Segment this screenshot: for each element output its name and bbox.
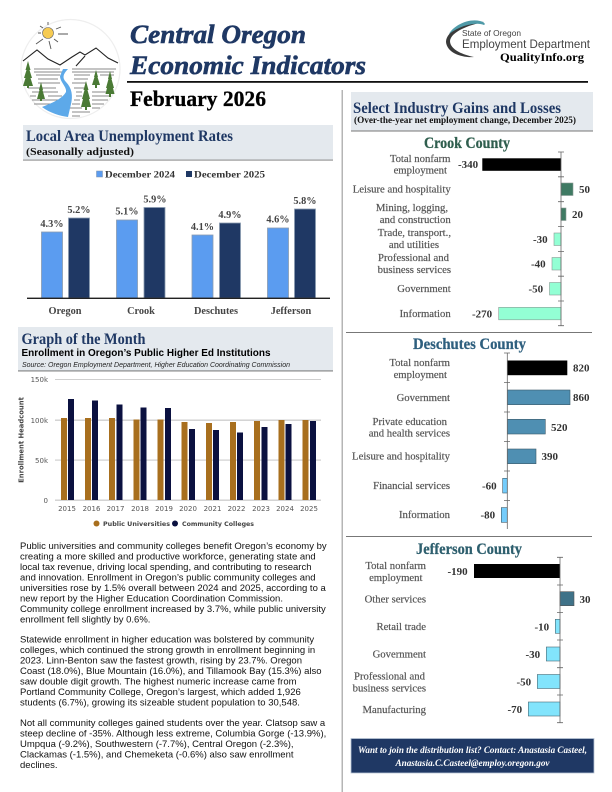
bar chart: enrollment headcount: 150k xyxy=(31,376,49,384)
heading: graph of the month xyxy=(18,327,333,371)
bar chart: Crook County xyxy=(353,152,590,326)
bar chart: enrollment headcount: 2025 xyxy=(300,505,318,513)
bar chart: Deschutes County: 820 xyxy=(573,362,590,374)
legend: enrollment: Community Colleges xyxy=(182,521,254,528)
bar chart: unemployment rates: 5.8% xyxy=(293,196,317,207)
heading: graph of the month: Graph of the Month xyxy=(22,331,146,348)
bar chart: enrollment headcount: 2018 xyxy=(131,505,149,513)
bar chart: Deschutes County: Government xyxy=(397,392,450,404)
bar chart: Deschutes County: 860 xyxy=(573,392,590,404)
title xyxy=(129,20,366,80)
bar chart: Crook County: Trade, transport., xyxy=(378,227,451,239)
bar chart: Deschutes County: Total nonfarm xyxy=(389,357,451,369)
panel: Crook County xyxy=(353,135,590,326)
legend xyxy=(96,170,265,180)
text block: article paragraph 1: local tax revenue, driving local spending, and contributing to research xyxy=(20,562,312,573)
bar chart: Crook County: -40 xyxy=(531,258,546,270)
bar chart: Deschutes County: -60 xyxy=(482,480,497,492)
callout: distribution list: Anastasia.C.Casteel@employ.oregon.gov xyxy=(395,758,550,769)
heading: Deschutes County: Deschutes County xyxy=(413,336,526,353)
bar chart: unemployment rates: 4.1% xyxy=(191,222,214,233)
text block: article paragraph 2: colleges, which continued the strong growth in enrollment beginning in xyxy=(20,645,315,656)
bar chart: unemployment rates xyxy=(27,194,330,317)
legend: enrollment: Public Universities xyxy=(103,521,170,528)
bar chart: Jefferson County: -70 xyxy=(508,704,523,716)
logo: State of Oregon Employment Department xyxy=(446,20,591,64)
bar chart: Deschutes County: Leisure and hospitality xyxy=(352,450,451,462)
legend: December 2024 xyxy=(105,170,175,180)
heading: local area unemployment rates xyxy=(23,125,333,161)
text block: article paragraph 1: and innovation. Enrollment in Oregon’s public community colleges and xyxy=(20,572,316,584)
panel: Jefferson County xyxy=(353,541,591,723)
legend: enrollment xyxy=(94,520,254,528)
bar chart: enrollment headcount: 2019 xyxy=(155,505,173,513)
bar chart: Crook County: -270 xyxy=(472,308,493,320)
heading: local area unemployment rates: (Seasonally adjusted) xyxy=(26,147,135,158)
bar chart: Crook County: employment xyxy=(394,164,447,176)
bar chart: unemployment rates: 4.6% xyxy=(266,214,290,226)
text block: article paragraph 1: Public universities and community colleges benefit Oregon’s economy by xyxy=(20,541,327,552)
bar chart: Jefferson County: Retail trade xyxy=(376,621,426,633)
bar chart: Jefferson County: -50 xyxy=(516,676,532,688)
bar chart: unemployment rates: Jefferson xyxy=(271,306,312,317)
callout: distribution list xyxy=(351,738,594,773)
panel: Deschutes County xyxy=(352,336,590,529)
bar chart: Jefferson County: -190 xyxy=(448,566,468,578)
date heading: February 2026 xyxy=(130,86,266,111)
text block: article paragraph 2: Statewide enrollment in higher education was bolstered by community xyxy=(20,634,314,646)
text block: article paragraph 3: Umpqua (-9.2%), Southwestern (-7.7%), Central Oregon (-2.3%), xyxy=(20,739,294,750)
bar chart: unemployment rates: 4.3% xyxy=(40,219,64,230)
bar chart: Crook County: -340 xyxy=(458,159,479,171)
bar chart: enrollment headcount: 2023 xyxy=(252,505,270,513)
text block: article paragraph 1: new report by the Higher Education Coordination Commission. xyxy=(20,594,283,604)
text block: article paragraph 2: Coast (18.0%), Blue Mountain (16.0%), and Tillamook Bay (15.3%) also xyxy=(20,666,322,677)
bar chart: Crook County: and utilities xyxy=(389,239,439,251)
heading: local area unemployment rates: Local Area Unemployment Rates xyxy=(26,128,233,145)
logo: mountains, river and trees xyxy=(21,20,120,118)
bar chart: enrollment headcount: 2015 xyxy=(58,505,76,513)
bar chart: Crook County: -50 xyxy=(528,284,544,296)
bar chart: enrollment headcount: 0 xyxy=(44,497,48,505)
bar chart: Jefferson County: -30 xyxy=(526,649,541,661)
bar chart: Jefferson County: -10 xyxy=(534,622,550,634)
legend: December 2025 xyxy=(194,170,265,180)
title: Central Oregon xyxy=(130,20,306,49)
bar chart: Jefferson County: 30 xyxy=(580,594,591,606)
bar chart: Jefferson County: employment xyxy=(369,572,423,584)
panel: local area unemployment rates xyxy=(23,125,333,317)
bar chart: enrollment headcount: 2017 xyxy=(107,505,124,513)
text block: article paragraph 1: universities rose by 1.5% overall between 2024 and 2025, according to a xyxy=(20,583,326,594)
bar chart: enrollment headcount: 50k xyxy=(35,457,49,465)
bar chart: Deschutes County xyxy=(352,353,590,529)
bar chart: enrollment headcount xyxy=(18,376,321,513)
panel: graph of the month xyxy=(18,327,333,528)
bar chart: Deschutes County: 390 xyxy=(542,451,558,463)
bar chart: Crook County: and construction xyxy=(380,214,451,226)
bar chart: Crook County: business services xyxy=(378,264,451,276)
bar chart: Jefferson County: Government xyxy=(373,648,426,660)
text block: article paragraph 2: 2023. Linn-Benton saw the fastest growth, rising by 23.7%. Oregon xyxy=(20,656,302,666)
logo: State of Oregon Employment Department: State of Oregon xyxy=(462,28,521,38)
bar chart: Deschutes County: and health services xyxy=(369,428,450,440)
column divider xyxy=(342,90,343,792)
divider xyxy=(346,536,592,537)
bar chart: Jefferson County: Manufacturing xyxy=(362,704,427,716)
text block: article paragraph 1: Community college enrollment increased by 3.7%, while public university xyxy=(20,604,326,615)
bar chart: Deschutes County: employment xyxy=(394,369,447,381)
divider xyxy=(346,332,592,333)
logo: State of Oregon Employment Department: QualityInfo.org xyxy=(500,50,584,64)
text block: article paragraph 2: saw double digit growth. The highest numeric increase came from xyxy=(20,676,297,688)
heading: Jefferson County: Jefferson County xyxy=(416,541,522,558)
bar chart: unemployment rates: Crook xyxy=(127,306,155,317)
bar chart: Crook County: Government xyxy=(397,283,451,295)
title: Economic Indicators xyxy=(129,51,366,80)
callout: distribution list: Want to join the distribution list? Contact: Anastasia Casteel, xyxy=(358,745,587,756)
bar chart: Jefferson County: business services xyxy=(353,682,426,694)
bar chart: enrollment headcount: Enrollment Headcount xyxy=(18,396,26,483)
bar chart: Jefferson County: Total nonfarm xyxy=(365,560,427,572)
text block: article paragraph 3: declines. xyxy=(20,760,58,771)
bar chart: enrollment headcount: 2020 xyxy=(179,505,197,513)
bar chart: enrollment headcount: 100k xyxy=(31,417,49,425)
bar chart: unemployment rates: 5.1% xyxy=(115,206,139,218)
text block: article paragraph 1: creating a more skilled and productive workforce, generating state and xyxy=(20,552,316,562)
bar chart: Deschutes County: -80 xyxy=(480,510,496,522)
bar chart: Crook County: Information xyxy=(400,308,451,320)
heading: select industry gains and losses: (Over-the-year net employment change, December 2025) xyxy=(354,115,576,125)
bar chart: Deschutes County: Financial services xyxy=(373,480,450,492)
bar chart: Crook County: Mining, logging, xyxy=(376,202,448,214)
logo: State of Oregon Employment Department: Employment Department xyxy=(462,37,591,51)
bar chart: enrollment headcount: 2024 xyxy=(276,505,294,513)
bar chart: unemployment rates: 5.2% xyxy=(67,205,91,216)
bar chart: Jefferson County xyxy=(353,557,591,723)
bar chart: unemployment rates: Deschutes xyxy=(194,306,238,317)
text block: article paragraph 3: Not all community colleges gained students over the year. Clatsop saw a xyxy=(20,718,326,729)
bar chart: Crook County: 50 xyxy=(579,184,590,196)
bar chart: Jefferson County: Other services xyxy=(365,594,426,606)
bar chart: enrollment headcount: 2022 xyxy=(228,505,245,513)
bar chart: Jefferson County: Professional and xyxy=(354,670,426,682)
text block: article paragraph 3: Clackamas (-1.5%), and Chemeketa (-0.6%) also saw enrollment xyxy=(20,750,294,760)
bar chart: Deschutes County: Private education xyxy=(372,416,448,428)
bar chart: unemployment rates: 4.9% xyxy=(218,210,242,221)
bar chart: unemployment rates: Oregon xyxy=(48,306,82,317)
heading: graph of the month: Source: Oregon Employment Department, Higher Education Coordinating Commission xyxy=(22,360,290,369)
bar chart: unemployment rates: 5.9% xyxy=(143,194,167,206)
text block: article paragraph 3: steep decline of -35%. Although less extreme, Columbia Gorge (-13.9%), xyxy=(20,728,326,740)
bar chart: enrollment headcount: 2021 xyxy=(204,505,221,513)
header rule xyxy=(127,81,588,83)
heading: select industry gains and losses: Select Industry Gains and Losses xyxy=(353,100,561,117)
bar chart: Deschutes County: Information xyxy=(399,509,451,521)
bar chart: enrollment headcount: 2016 xyxy=(83,505,101,513)
bar chart: Crook County: Total nonfarm xyxy=(390,153,451,165)
heading: select industry gains and losses xyxy=(351,92,593,132)
bar chart: Crook County: Professional and xyxy=(378,252,450,264)
bar chart: Crook County: -30 xyxy=(533,234,548,246)
bar chart: Crook County: Leisure and hospitality xyxy=(353,184,451,196)
text block: article paragraph 2: students (6.7%), growing its sizeable student population to 30,548. xyxy=(20,698,300,708)
bar chart: Crook County: 20 xyxy=(572,209,584,221)
bar chart: Deschutes County: 520 xyxy=(551,422,568,434)
text block: article paragraph 1: enrollment fell slightly by 0.6%. xyxy=(20,614,150,626)
text block: article paragraph 2: Portland Community College, Oregon’s largest, which added 1,926 xyxy=(20,687,301,698)
heading: graph of the month: Enrollment in Oregon’s Public Higher Ed Institutions xyxy=(22,348,271,359)
heading: Crook County: Crook County xyxy=(424,135,510,152)
